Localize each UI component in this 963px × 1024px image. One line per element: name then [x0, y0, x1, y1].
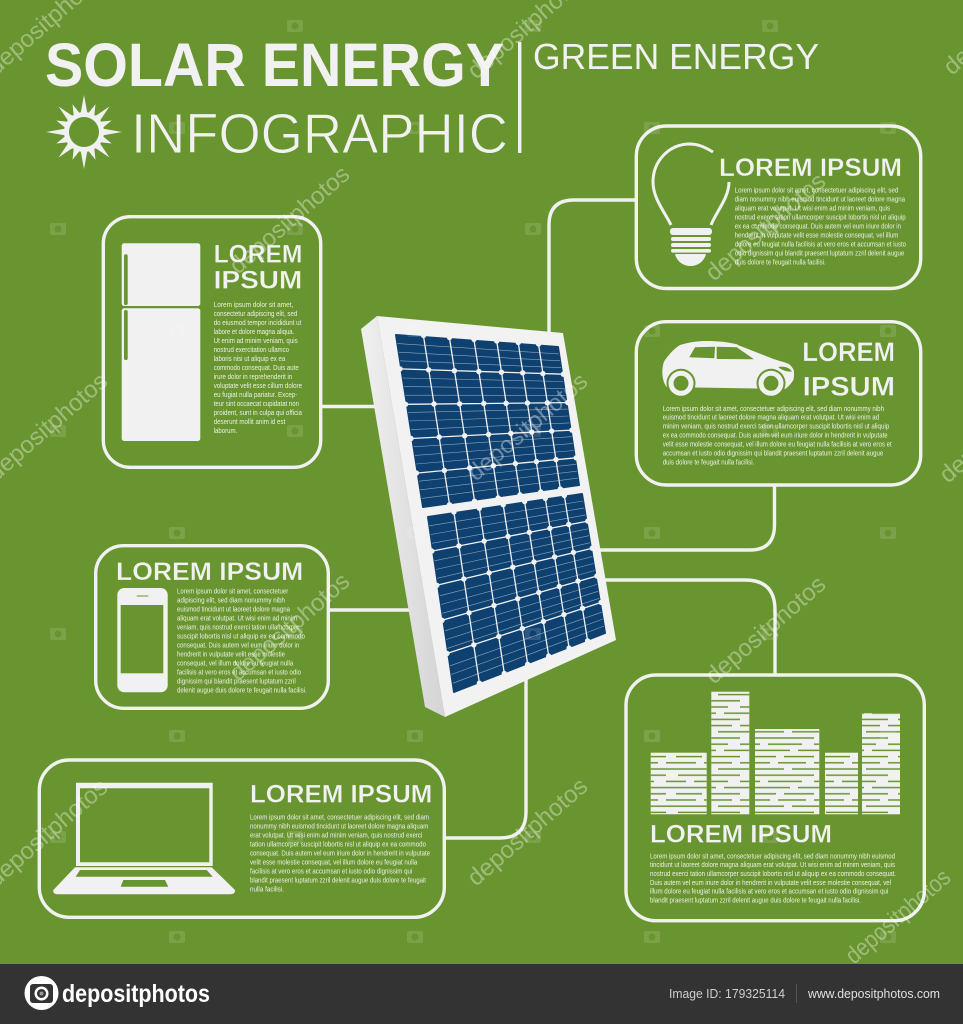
heading: [214, 240, 302, 295]
panel: city buildings: [626, 675, 924, 921]
stock watermark: depositphotos: [700, 168, 831, 287]
body text: Lorem ipsum dolor sit amet, consectetuer adipiscing elit, sed diam nonummy nibh euismod: [650, 851, 895, 860]
body text: illum dolore eu feugiat nulla facilisis at vero eros et accumsan et iusto odio dignissim qui: [650, 887, 889, 896]
body text: Lorem ipsum dolor sit amet,: [214, 300, 293, 309]
body text: euismod tincidunt ut laoreet dolore magna: [177, 604, 291, 613]
icon: light bulb: [653, 144, 729, 266]
icon: buildings: [651, 692, 900, 814]
body text: laboris nisi ut aliquip ex ea: [214, 354, 286, 363]
stock watermark: depositphotos: [224, 568, 355, 687]
body text: duis dolore te feugait nulla facilisi.: [735, 258, 826, 267]
title: infographic: INFOGRAPHIC: [131, 102, 508, 166]
stock watermark: depositphotos: [462, 773, 593, 892]
body text: accumsan et iusto odio dignissim qui blandit praesent luptatum zzril delenit augue: [663, 449, 883, 458]
body text: suscipit lobortis nisl ut aliquip ex ea commodo: [177, 631, 305, 640]
body text: odio dignissim qui blandit praesent luptatum zzril delenit augue: [735, 249, 904, 258]
body text: dignissim qui blandit praesent luptatum zzril: [177, 676, 296, 685]
body text: [214, 300, 303, 435]
heading: LOREM IPSUM: [116, 558, 303, 586]
body text: nulla facilisi.: [250, 885, 284, 894]
heading: LOREM IPSUM: [650, 820, 832, 848]
body text: laborum.: [214, 426, 237, 435]
heading: LOREM IPSUM: [250, 780, 432, 808]
body text: nostrud exerci tation ullamcorper suscipit lobortis nisl ut aliquip ex ea commodo consequat.: [650, 869, 896, 878]
body text: blandit praesent luptatum zzril delenit augue duis dolore te feugait nulla facilisi.: [650, 896, 861, 905]
body text: hendrerit in vulputate velit esse molestie consequat, vel illum: [735, 231, 898, 240]
title: solar energy: SOLAR ENERGY: [45, 31, 504, 99]
body text: adipiscing elit, sed diam nonummy nibh: [177, 595, 285, 604]
body text: commodo consequat. Duis aute: [214, 363, 299, 372]
body text: irure dolor in reprehenderit in: [214, 372, 292, 381]
body text: Lorem ipsum dolor sit amet, consectetuer adipiscing elit, sed diam nonummy nibh: [663, 404, 884, 413]
body text: aliquam erat volutpat. Ut wisi enim ad minim veniam, quis: [735, 204, 890, 213]
footer logo text: depositphotos: [62, 980, 210, 1008]
body text: consequat. Duis autem vel eum iriure dolor in: [177, 640, 299, 649]
body text: consequat, vel illum dolore eu feugiat nulla: [177, 658, 294, 667]
footer divider: [796, 984, 797, 1003]
body text: [250, 813, 430, 894]
subtitle: green energy: GREEN ENERGY: [533, 36, 819, 77]
heading: LOREM IPSUM: [719, 154, 902, 182]
solar panel: [361, 316, 616, 717]
icon: smartphone: [117, 588, 168, 692]
body text: labore et dolore magna aliqua.: [214, 327, 294, 336]
panel: light bulb: [636, 126, 921, 288]
body text: Duis autem vel eum iriure dolor in hendrerit in vulputate velit esse molestie consequat, vel: [650, 878, 891, 887]
stock watermark: depositphotos: [700, 571, 831, 690]
body text: ex ea commodo consequat. Duis autem vel eum iriure dolor in: [735, 222, 901, 231]
body text: diam nonummy nibh euismod tincidunt ut laoreet dolore magna: [735, 195, 906, 204]
heading: IPSUM: [803, 371, 895, 401]
heading: [802, 337, 895, 401]
body text: ex ea commodo consequat. Duis autem vel eum iriure dolor in hendrerit in vulputate: [663, 431, 888, 440]
connector lines: [321, 200, 775, 838]
body text: velit esse molestie consequat, vel illum dolore eu feugiat nulla facilisis at vero eros et: [663, 440, 892, 449]
body text: facilisis at vero eros et accumsan et iusto odio: [177, 667, 301, 676]
body text: facilisis at vero eros et accumsan et iusto odio dignissim qui: [250, 867, 413, 876]
icon: refrigerator: [122, 243, 200, 441]
body text: tincidunt ut laoreet dolore magna aliquam erat volutpat. Ut wisi enim ad minim veniam, quis: [650, 860, 895, 869]
body text: duis dolore te feugait nulla facilisi.: [663, 458, 754, 467]
body text: teur sint occaecat cupidatat non: [214, 399, 299, 408]
body text: [177, 586, 307, 694]
stock watermark: depositphotos: [224, 161, 355, 280]
solar cells: upper block: [396, 333, 579, 507]
body text: deserunt mollit anim id est: [214, 417, 286, 426]
panel: refrigerator: [103, 217, 321, 467]
solar cells: lower block: [428, 493, 605, 692]
body text: dolore eu feugiat nulla facilisis at vero eros et accumsan et iusto: [735, 240, 906, 249]
body text: eu fugiat nulla pariatur. Excep-: [214, 390, 298, 399]
icon: car: [662, 341, 794, 398]
title divider: [518, 42, 521, 153]
body text: euismod tincidunt ut laoreet dolore magna aliquam erat volutpat. Ut wisi enim ad: [663, 413, 879, 422]
stock watermark: depositphotos: [462, 368, 593, 487]
body text: [735, 186, 906, 267]
body text: nostrud exercitation ullamco: [214, 345, 289, 354]
body text: [663, 404, 892, 467]
body text: Lorem ipsum dolor sit amet, consectetuer adipiscing elit, sed: [735, 186, 898, 195]
panel: smartphone: [96, 546, 328, 708]
heading: LOREM: [214, 240, 302, 268]
body text: Lorem ipsum dolor sit amet, consectetuer: [177, 586, 289, 595]
body text: velit esse molestie consequat, vel illum dolore eu feugiat nulla: [250, 858, 418, 867]
body text: erat volutpat. Ut wisi enim ad minim veniam, quis nostrud exerci: [250, 831, 423, 840]
body text: minim veniam, quis nostrud exerci tation ullamcorper suscipit lobortis nisl ut aliquip: [663, 422, 889, 431]
body text: nostrud exerci tation ullamcorper suscipit lobortis nisl ut aliquip: [735, 213, 906, 222]
body text: consectetur adipiscing elit, sed: [214, 309, 297, 318]
panel: laptop: [39, 760, 444, 917]
body text: nonummy nibh euismod tincidunt ut laoreet dolore magna aliquam: [250, 822, 428, 831]
body text: [650, 851, 896, 905]
body text: aliquam erat volutpat. Ut wisi enim ad minim: [177, 613, 297, 622]
icon: sun: [46, 95, 122, 169]
footer bar: [0, 964, 963, 1024]
body text: do eiusmod tempor incididunt ut: [214, 318, 302, 327]
body text: proident, sunt in culpa qui officia: [214, 408, 303, 417]
footer url: www.depositphotos.com: [807, 987, 940, 1001]
body text: tation ullamcorper suscipit lobortis nisl ut aliquip ex ea commodo: [250, 840, 426, 849]
icon: laptop: [53, 783, 235, 894]
body text: Ut enim ad minim veniam, quis: [214, 336, 298, 345]
body text: consequat. Duis autem vel eum iriure dolor in hendrerit in vulputate: [250, 849, 430, 858]
panel: car: [636, 322, 921, 485]
body text: voluptate velit esse cillum dolore: [214, 381, 302, 390]
body text: blandit praesent luptatum zzril delenit augue duis dolore te feugait: [250, 876, 427, 885]
body text: hendrerit in vulputate velit esse molestie: [177, 649, 285, 658]
heading: IPSUM: [214, 267, 302, 295]
heading: LOREM: [802, 337, 895, 367]
body text: delenit augue duis dolore te feugait nulla facilisi.: [177, 685, 307, 694]
body text: veniam, quis nostrud exerci tation ullamcorper: [177, 622, 300, 631]
body text: Lorem ipsum dolor sit amet, consectetuer adipiscing elit, sed diam: [250, 813, 429, 822]
image id: Image ID: 179325114: [669, 987, 785, 1001]
icon: depositphotos camera logo: [24, 976, 58, 1010]
